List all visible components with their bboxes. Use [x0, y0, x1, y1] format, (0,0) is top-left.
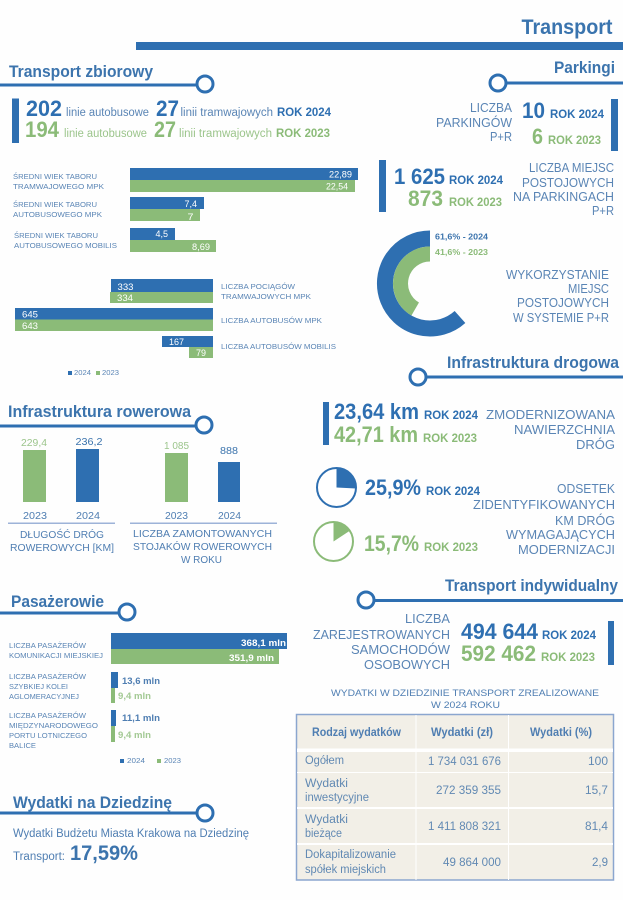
column chart: length of cycle paths: 229,4	[21, 438, 47, 449]
stat: number of parking spaces: P+R	[592, 204, 614, 218]
stat: registered passenger cars	[313, 612, 614, 672]
bar chart: number of vehicles: 167	[169, 337, 184, 347]
legend: vehicles chart	[68, 368, 119, 377]
stat: number of parking spaces: 1 625	[394, 164, 445, 189]
table: 81,4	[585, 821, 609, 833]
stat: number of bus and tram lines	[12, 96, 332, 143]
bar chart: average fleet age: 4,5	[156, 229, 168, 239]
bar chart: passengers: SZYBKIEJ KOLEI	[9, 682, 68, 691]
stat: number of bus and tram lines: ROK 2023	[276, 128, 330, 140]
legend: vehicles chart: 2024	[74, 368, 91, 377]
column chart: length of cycle paths	[8, 437, 115, 554]
panel: Transport indywidualny	[313, 576, 623, 672]
bar chart: number of vehicles: 643	[22, 321, 38, 331]
bar chart: passengers: LICZBA PASAŻERÓW	[9, 672, 87, 681]
stat: number of parking spaces: ROK 2023	[449, 197, 502, 209]
stat: registered passenger cars: 592 462	[461, 641, 536, 666]
page title: Transport: Transport	[522, 16, 612, 39]
text: usage label: MIEJSC	[568, 282, 609, 296]
stat: number of P+R car parks: LICZBA	[470, 101, 513, 115]
stat: registered passenger cars: ZAREJESTROWANYCH	[313, 628, 450, 642]
stat: number of bus and tram lines: linii tramwajowych	[180, 107, 273, 119]
legend: vehicles chart: 2023	[102, 368, 119, 377]
text: share of roads needing modernisation: KM DRÓG	[555, 513, 615, 528]
legend: passengers chart: 2023	[164, 756, 181, 765]
bar chart: number of vehicles: LICZBA AUTOBUSÓW MPK	[221, 316, 322, 325]
stat: number of bus and tram lines: linie autobusowe	[66, 107, 149, 119]
bar chart: passengers	[9, 633, 287, 750]
table: 2,9	[592, 857, 608, 869]
stat: number of P+R car parks: 6	[532, 124, 543, 149]
column chart: length of cycle paths: ROWEROWYCH [KM]	[10, 543, 114, 554]
panel: Transport zbiorowy	[0, 62, 358, 377]
bar chart: passengers: 368,1 mln	[241, 638, 286, 648]
table: Ogółem	[305, 755, 344, 767]
table: 1 411 808 321	[428, 821, 501, 833]
stat: 15.7%: ROK 2023	[424, 542, 478, 554]
table: Dokapitalizowanie	[305, 849, 396, 861]
column chart: bicycle stands installed: STOJAKÓW ROWEROWYCH	[133, 540, 272, 553]
bar chart: passengers: LICZBA PASAŻERÓW	[9, 641, 87, 650]
column chart: length of cycle paths: 2024	[76, 511, 100, 522]
stat: number of bus and tram lines: ROK 2024	[277, 107, 332, 119]
stat: number of P+R car parks: 10	[522, 98, 545, 123]
legend: passengers chart: 2024	[127, 756, 145, 765]
heading: Parkingi: Parkingi	[554, 58, 615, 77]
panel: Pasażerowie	[0, 592, 287, 765]
bar chart: passengers: LICZBA PASAŻERÓW	[9, 711, 87, 720]
stat: 25.9%: 25,9%	[365, 475, 421, 500]
stat: modernised road surface: 23,64 km	[334, 399, 419, 424]
bar chart: passengers: PORTU LOTNICZEGO	[9, 731, 87, 740]
stat: number of parking spaces: 873	[408, 186, 443, 211]
column chart: length of cycle paths: 2023	[23, 511, 47, 522]
stat: modernised road surface: DRÓG	[576, 437, 615, 452]
table: Wydatki	[305, 778, 348, 790]
bar chart: passengers: KOMUNIKACJI MIEJSKIEJ	[9, 651, 103, 660]
table: 49 864 000	[443, 857, 501, 869]
heading: Parkingi	[490, 58, 623, 91]
stat: modernised road surface: ROK 2024	[424, 410, 479, 422]
legend: passengers chart	[120, 756, 181, 765]
text: share of roads needing modernisation: WYMAGAJĄCYCH	[506, 528, 615, 542]
column chart: bicycle stands installed: LICZBA ZAMONTOWANYCH	[133, 529, 272, 540]
panel: expenditure table	[296, 688, 614, 880]
bar chart: average fleet age: 7	[188, 212, 194, 222]
heading: Pasażerowie: Pasażerowie	[11, 592, 104, 611]
donut chart: P+R space usage	[385, 232, 488, 328]
bar chart: passengers: 351,9 mln	[229, 653, 274, 663]
stat: number of P+R car parks: ROK 2024	[550, 109, 605, 121]
panel: Infrastruktura drogowa	[314, 353, 623, 561]
heading: Transport zbiorowy: Transport zbiorowy	[9, 62, 153, 81]
stat: 25.9%	[365, 475, 481, 500]
bar chart: average fleet age: AUTOBUSOWEGO MOBILIS	[14, 241, 117, 250]
bar chart: number of vehicles: LICZBA AUTOBUSÓW MOBILIS	[221, 342, 336, 351]
bar chart: passengers: MIĘDZYNARODOWEGO	[9, 721, 98, 730]
text: share of roads needing modernisation	[473, 482, 616, 557]
text: budget share: Transport:	[13, 851, 65, 863]
bar chart: average fleet age	[13, 168, 358, 252]
heading: Infrastruktura rowerowa: Infrastruktura rowerowa	[8, 402, 192, 421]
stat: number of bus and tram lines: 27	[154, 117, 176, 142]
bar chart: average fleet age: 22,89	[329, 170, 352, 180]
stat: modernised road surface	[323, 399, 616, 452]
bar chart: number of vehicles: 334	[117, 293, 133, 303]
table: 100	[588, 756, 608, 768]
column chart: bicycle stands installed: 2024	[218, 511, 241, 522]
text: usage label: WYKORZYSTANIE	[506, 268, 609, 282]
stat: registered passenger cars: LICZBA	[405, 612, 451, 626]
bar chart: average fleet age: 22,54	[326, 182, 348, 192]
stat: number of parking spaces: LICZBA MIEJSC	[529, 161, 614, 175]
stat: registered passenger cars: ROK 2023	[541, 652, 595, 664]
heading: Wydatki na Dziedzinę: Wydatki na Dziedzinę	[13, 793, 172, 812]
table title: WYDATKI W DZIEDZINIE TRANSPORT ZREALIZOWANE	[331, 688, 599, 698]
stat: number of P+R car parks: P+R	[490, 130, 512, 144]
stat: number of parking spaces: NA PARKINGACH	[513, 190, 614, 204]
bar chart: average fleet age: 8,69	[192, 242, 210, 252]
table: 272 359 355	[436, 785, 501, 797]
stat: number of P+R car parks	[436, 98, 618, 151]
table: 15,7	[585, 785, 608, 797]
stat: number of parking spaces: POSTOJOWYCH	[522, 176, 614, 190]
bar chart: average fleet age: ŚREDNI WIEK TABORU	[14, 231, 98, 240]
bar chart: average fleet age: AUTOBUSOWEGO MPK	[13, 210, 102, 219]
bar chart: passengers: 13,6 mln	[122, 676, 160, 686]
stat: registered passenger cars: SAMOCHODÓW	[351, 642, 450, 657]
heading: Transport zbiorowy	[0, 62, 213, 92]
stat: modernised road surface: ROK 2023	[423, 433, 477, 445]
heading: Pasażerowie	[0, 592, 135, 620]
stat: number of bus and tram lines: 194	[25, 117, 60, 142]
column chart: bicycle stands installed: 1 085	[164, 441, 189, 452]
column chart: bicycle stands installed	[130, 441, 277, 566]
table title: W 2024 ROKU	[431, 700, 500, 710]
table	[296, 714, 614, 880]
bar chart: passengers: BALICE	[9, 741, 36, 750]
text: usage label	[506, 268, 609, 325]
donut chart: P+R space usage: 41,6% - 2023	[435, 247, 488, 257]
column chart: bicycle stands installed: 888	[220, 446, 238, 457]
stat: 25.9%: ROK 2024	[426, 486, 481, 498]
heading: Transport indywidualny	[358, 576, 623, 608]
column chart: length of cycle paths: 236,2	[76, 437, 103, 448]
stat: 15.7%: 15,7%	[364, 531, 419, 556]
table: inwestycyjne	[305, 792, 369, 804]
stat: modernised road surface: NAWIERZCHNIA	[514, 423, 616, 437]
stat: modernised road surface: ZMODERNIZOWANA	[486, 408, 616, 422]
text: share of roads needing modernisation: ODSETEK	[557, 482, 616, 496]
bar chart: passengers: 9,4 mln	[118, 691, 151, 701]
stat: number of P+R car parks: PARKINGÓW	[436, 115, 512, 130]
text: budget share: 17,59%	[70, 842, 138, 865]
bar chart: average fleet age: 7,4	[184, 199, 197, 209]
stat: number of P+R car parks: ROK 2023	[548, 135, 601, 147]
bar chart: number of vehicles: 645	[22, 310, 38, 320]
stat: number of bus and tram lines: 202	[26, 96, 62, 121]
panel: Wydatki na Dziedzinę	[0, 793, 249, 865]
table: Wydatki (zł)	[431, 727, 493, 739]
bar chart: number of vehicles: 333	[118, 282, 134, 292]
bar chart: number of vehicles	[15, 279, 336, 358]
pie chart: 25.9% in 2024	[317, 468, 356, 507]
column chart: length of cycle paths: DŁUGOŚĆ DRÓG	[20, 528, 104, 541]
bar chart: average fleet age: TRAMWAJOWEGO MPK	[13, 182, 104, 191]
column chart: bicycle stands installed: 2023	[165, 511, 188, 522]
panel: Parkingi	[379, 58, 623, 328]
table: Wydatki	[305, 814, 348, 826]
bar chart: number of vehicles: LICZBA POCIĄGÓW	[221, 282, 296, 291]
bar chart: passengers: AGLOMERACYJNEJ	[9, 692, 79, 701]
bar chart: average fleet age: ŚREDNI WIEK TABORU	[13, 200, 97, 209]
text: usage label: POSTOJOWYCH	[517, 296, 609, 310]
text: usage label: W SYSTEMIE P+R	[513, 311, 609, 325]
table: bieżące	[305, 828, 342, 840]
stat: 15.7%	[364, 531, 478, 556]
stat: registered passenger cars: 494 644	[461, 619, 539, 644]
bar chart: passengers: 11,1 mln	[122, 713, 160, 723]
stat: number of parking spaces: ROK 2024	[449, 175, 504, 187]
table: 1 734 031 676	[428, 756, 501, 768]
heading: Infrastruktura rowerowa	[0, 402, 212, 433]
text: share of roads needing modernisation: MODERNIZACJI	[518, 543, 615, 557]
page title: Transport	[136, 16, 623, 50]
bar chart: passengers: 9,4 mln	[118, 730, 151, 740]
table title	[331, 688, 599, 710]
heading: Infrastruktura drogowa	[410, 353, 623, 385]
column chart: bicycle stands installed: W ROKU	[181, 555, 222, 566]
stat: number of bus and tram lines: 27	[156, 96, 179, 121]
stat: registered passenger cars: ROK 2024	[542, 630, 597, 642]
text: budget share: Wydatki Budżetu Miasta Krakowa na Dziedzinę	[13, 828, 249, 840]
text: share of roads needing modernisation: ZIDENTYFIKOWANYCH	[473, 498, 615, 512]
table: Wydatki (%)	[530, 727, 592, 739]
stat: number of bus and tram lines: linie autobusowe	[64, 128, 147, 140]
text: budget share	[13, 828, 249, 865]
bar chart: number of vehicles: TRAMWAJOWYCH MPK	[221, 292, 311, 301]
stat: registered passenger cars: OSOBOWYCH	[364, 658, 450, 672]
stat: number of parking spaces	[379, 160, 614, 218]
heading: Wydatki na Dziedzinę	[0, 793, 213, 821]
bar chart: number of vehicles: 79	[196, 348, 206, 358]
stat: modernised road surface: 42,71 km	[334, 422, 418, 447]
table: Rodzaj wydatków	[312, 727, 401, 739]
bar chart: average fleet age: ŚREDNI WIEK TABORU	[13, 172, 97, 181]
table: spółek miejskich	[305, 864, 386, 876]
stat: number of bus and tram lines: linii tramwajowych	[179, 128, 272, 140]
pie chart: 15.7% in 2023	[314, 522, 353, 561]
donut chart: P+R space usage: 61,6% - 2024	[435, 232, 488, 242]
panel: Infrastruktura rowerowa	[0, 402, 277, 566]
